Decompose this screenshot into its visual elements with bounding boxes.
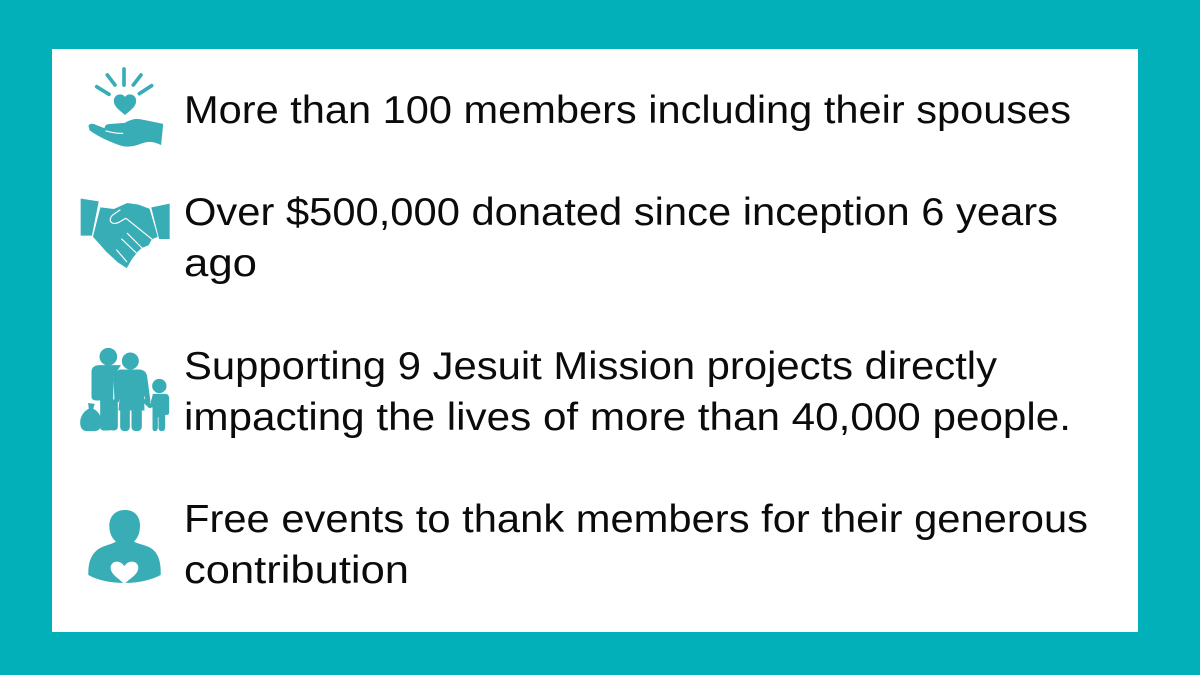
icon: family with bag: [81, 348, 169, 431]
text: members: More than 100 members including their spouses: [184, 89, 1071, 132]
text: events: contribution: [184, 549, 409, 592]
icon: hand holding heart: [89, 69, 163, 146]
icon: handshake: [81, 199, 169, 268]
text: donations: ago: [184, 242, 257, 285]
icon: person with heart: [88, 510, 161, 584]
text: projects: [184, 345, 1071, 439]
text: events: [184, 498, 1088, 592]
text: projects: impacting the lives of more than 40,000 people.: [184, 396, 1071, 439]
text: donations: [184, 191, 1058, 285]
text: events: Free events to thank members for their generous: [184, 498, 1088, 541]
text: donations: Over $500,000 donated since inception 6 years: [184, 191, 1058, 234]
text: projects: Supporting 9 Jesuit Mission projects directly: [184, 345, 998, 388]
panel: white card: [52, 49, 1138, 632]
